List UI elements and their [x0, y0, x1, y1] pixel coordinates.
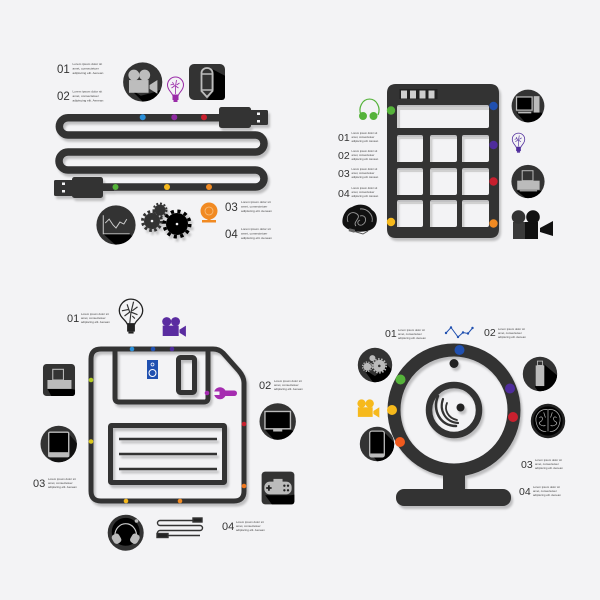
label 02: Lorem ipsum dolor sit [72, 90, 102, 94]
label 03: amet, consectetuer [535, 462, 559, 466]
label 04: adipiscing elit. Aenean [533, 493, 561, 497]
icon: violet bulb [512, 133, 525, 153]
label 03 [338, 167, 379, 180]
webcam body [394, 350, 514, 506]
label 01 [385, 328, 426, 340]
panel: USB cable infographic [54, 62, 272, 254]
label 03: amet, consectetuer [352, 171, 374, 175]
label 04: amet, consectetuer [533, 489, 557, 493]
label 01 [338, 131, 379, 144]
label 01: adipiscing elit. Aenean [72, 71, 104, 75]
panel: calculator infographic [338, 84, 553, 239]
calculator body [387, 84, 499, 238]
label 03: 03 [225, 202, 238, 214]
label 02: amet, consectetuer [498, 331, 522, 335]
icon: black video camera [512, 210, 553, 239]
label 01 [67, 312, 110, 325]
label 02: amet, consectetuer [72, 94, 99, 98]
label 04 [222, 520, 265, 533]
label 04: amet, consectetuer [352, 190, 374, 194]
icon: small USB cable [157, 518, 202, 538]
label 04: 04 [338, 188, 350, 200]
label 04 [338, 186, 379, 200]
icon: purple wrench [213, 387, 237, 399]
label 04: adipiscing elit. Aenean [352, 194, 379, 198]
icon: monitor circle [512, 90, 544, 122]
label 03: 03 [521, 459, 533, 471]
label 03: Lorem ipsum dolor sit [535, 458, 562, 462]
label 02: adipiscing elit. Aenean [274, 387, 303, 391]
label 04: amet, consectetuer [241, 232, 267, 236]
label 03 [225, 200, 272, 214]
label 03: Lorem ipsum dolor sit [352, 167, 377, 171]
label 02: amet, consectetuer [274, 383, 299, 387]
label 03 [33, 477, 77, 490]
calculator dots [387, 102, 498, 228]
label 02: amet, consectetuer [352, 153, 374, 157]
icon: blue speaker [147, 360, 158, 379]
label 02: adipiscing elit. Aenean [352, 157, 379, 161]
label 01: 01 [57, 64, 70, 76]
label 02 [338, 149, 379, 162]
icon: USB circle [522, 356, 558, 392]
label 02: 02 [259, 380, 271, 392]
label 03: adipiscing elit. Aenean [535, 466, 563, 470]
label 02: 02 [484, 327, 496, 339]
icon: pencil tile [189, 64, 225, 100]
label 04: amet, consectetuer [236, 524, 261, 528]
label 01: amet, consectetuer [81, 316, 106, 320]
label 01 [57, 62, 104, 76]
label 02: Lorem ipsum dolor sit [274, 379, 302, 383]
icon: chart circle [96, 205, 136, 245]
icon: headphones circle [108, 515, 144, 551]
label 01: Lorem ipsum dolor sit [72, 62, 102, 66]
floppy outline [91, 349, 244, 501]
label 01: amet, consectetuer [398, 332, 422, 336]
icon: purple bulb [168, 77, 184, 102]
label 03: Lorem ipsum dolor sit [241, 200, 271, 204]
label 04: Lorem ipsum dolor sit [236, 520, 264, 524]
USB cable [54, 107, 268, 198]
icon: green headphones [360, 99, 379, 120]
icon: phone circle [360, 426, 394, 462]
label 02: 02 [338, 150, 350, 162]
label 03: amet, consectetuer [48, 481, 73, 485]
icon: purple video camera [162, 317, 186, 337]
label 02: 02 [57, 91, 70, 103]
icon: printer tile [42, 364, 76, 396]
label 03: adipiscing elit. Aenean [48, 485, 77, 489]
label 04 [225, 227, 272, 241]
label 01: adipiscing elit. Aenean [398, 336, 426, 340]
icon: gamepad tile [262, 472, 294, 504]
label 04: 04 [225, 229, 238, 241]
panel: floppy disk infographic [33, 299, 305, 551]
label 03 [521, 458, 563, 471]
icon: brain with plug [342, 205, 377, 234]
icon: printer circle [511, 164, 545, 198]
label 01: amet, consectetuer [72, 66, 99, 70]
icon: blue line chart [445, 326, 474, 338]
label 04: adipiscing elit. Aenean [241, 236, 272, 240]
label 02: Lorem ipsum dolor sit [498, 327, 525, 331]
label 01: amet, consectetuer [352, 135, 374, 139]
label 04: Lorem ipsum dolor sit [241, 227, 271, 231]
label 01: Lorem ipsum dolor sit [352, 131, 377, 135]
icon: gears [142, 204, 190, 237]
label 01: Lorem ipsum dolor sit [398, 328, 425, 332]
label 02: Lorem ipsum dolor sit [352, 149, 377, 153]
icon: black bulb [119, 299, 143, 334]
icon: yellow video camera [357, 399, 379, 418]
label 01: adipiscing elit. Aenean [352, 139, 379, 143]
label 03: adipiscing elit. Aenean [352, 175, 379, 179]
icon: brain circle [531, 404, 565, 438]
icon: tablet circle [40, 426, 77, 462]
label 03: adipiscing elit. Aenean [241, 209, 272, 213]
webcam dots [387, 345, 518, 447]
label 04: 04 [519, 486, 531, 498]
icon: orange webcam [200, 202, 218, 222]
label 04: Lorem ipsum dolor sit [352, 186, 377, 190]
label 01: adipiscing elit. Aenean [81, 320, 110, 324]
label 02 [57, 90, 104, 103]
label 04: 04 [222, 521, 234, 533]
label 03: 03 [33, 478, 45, 490]
label 02 [484, 327, 526, 339]
label 02: adipiscing elit. Aenean [72, 98, 104, 102]
label 01: Lorem ipsum dolor sit [81, 312, 109, 316]
icon: video camera circle [123, 62, 162, 102]
lens swirls [436, 396, 458, 426]
label 01: 01 [67, 313, 79, 325]
label 03: 03 [338, 168, 350, 180]
cable dots [112, 114, 212, 190]
label 04: Lorem ipsum dolor sit [533, 485, 560, 489]
icon: TV circle [260, 403, 296, 440]
icon: gears circle [358, 348, 392, 382]
label 04: adipiscing elit. Aenean [236, 528, 265, 532]
panel: webcam infographic [357, 326, 566, 506]
label 02: adipiscing elit. Aenean [498, 335, 526, 339]
label 01: 01 [385, 328, 397, 340]
floppy dots [89, 347, 246, 503]
label 03: amet, consectetuer [241, 204, 267, 208]
label 03: Lorem ipsum dolor sit [48, 477, 76, 481]
label 02 [259, 379, 303, 392]
label 01: 01 [338, 132, 350, 144]
label 04 [519, 485, 561, 498]
